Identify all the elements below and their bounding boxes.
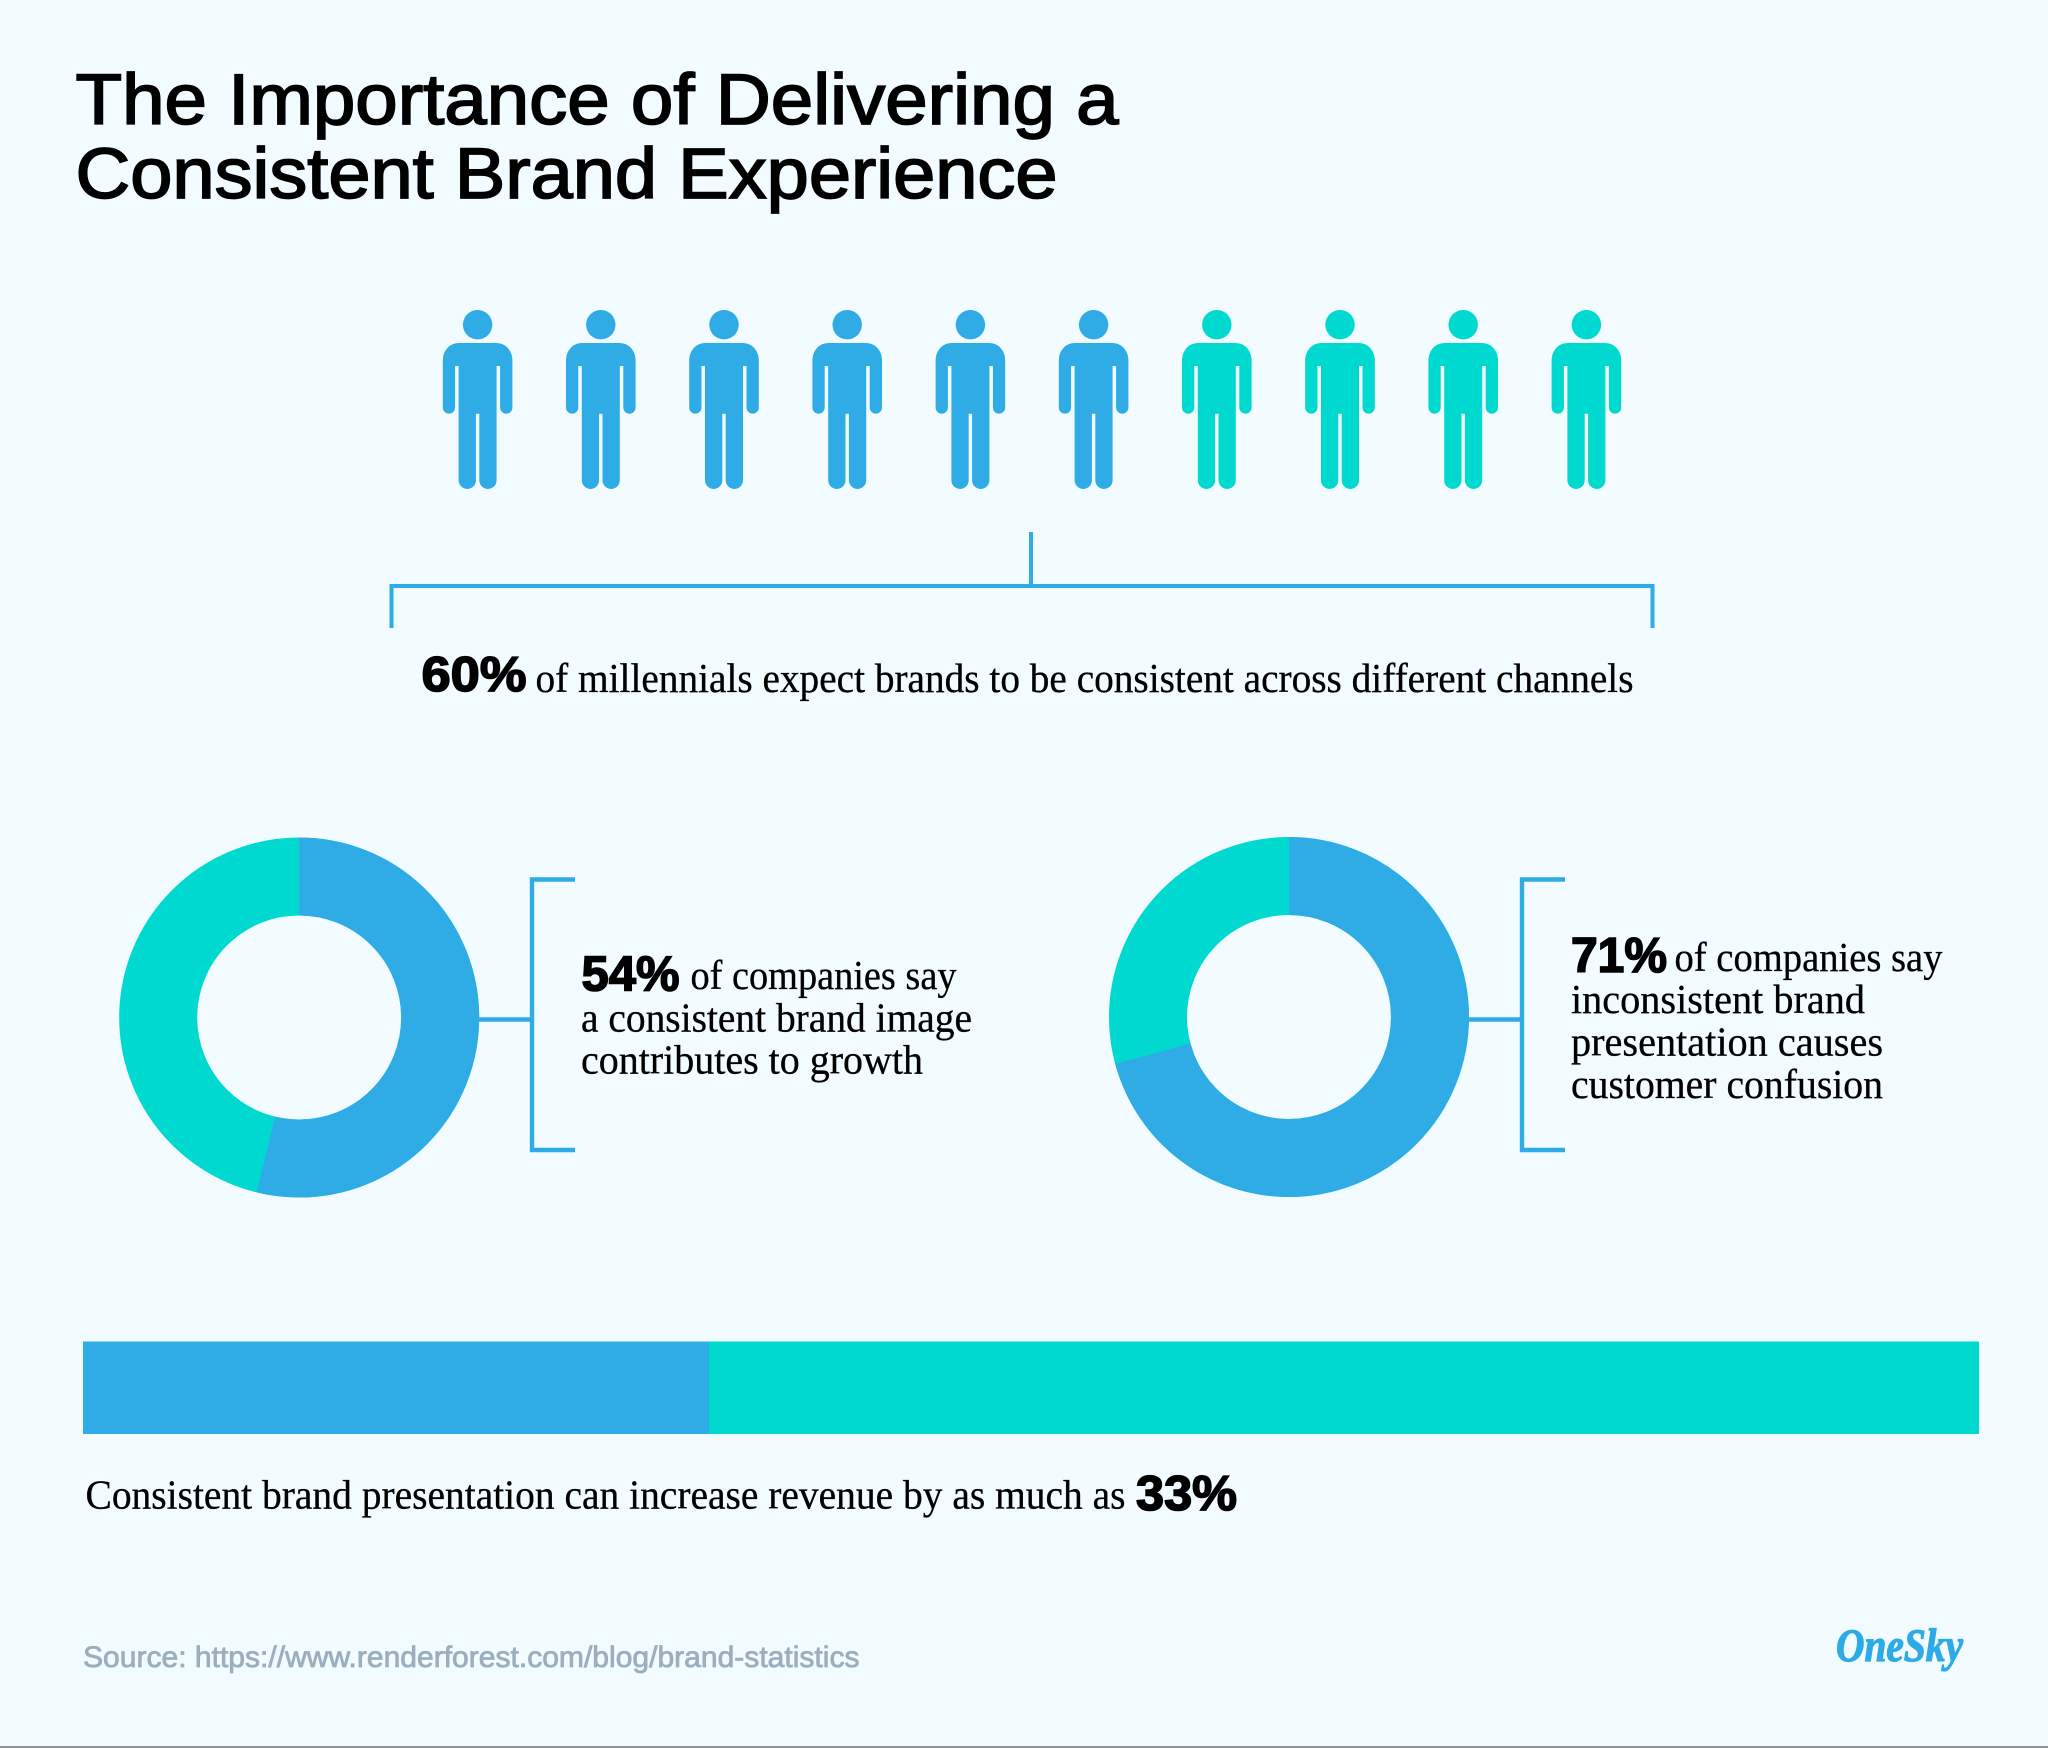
bracket under people bbox=[392, 532, 1652, 628]
statement: 54% of companies: of companies say bbox=[690, 952, 957, 998]
statement: 71% of companies: of companies say bbox=[1674, 934, 1943, 980]
statement: 60% of millennials: 60% bbox=[422, 648, 526, 702]
statement: 54% of companies: contributes to growth bbox=[581, 1036, 923, 1082]
donut chart: 54% bbox=[158, 876, 440, 1158]
statement: 71% of companies: customer confusion bbox=[1571, 1061, 1883, 1107]
statement: 54% of companies: 54% bbox=[582, 948, 680, 1002]
statement: 71% of companies: presentation causes bbox=[1571, 1018, 1883, 1064]
title: Consistent Brand Experience bbox=[76, 135, 1058, 214]
title: The Importance of Delivering a bbox=[76, 61, 1119, 140]
statement: revenue increase 33%: Consistent brand presentation can increase revenue by as much as bbox=[86, 1472, 1126, 1518]
statement: 60% of millennials: of millennials expect brands to be consistent across different channels bbox=[536, 655, 1634, 701]
bracket: 71% donut callout bbox=[1469, 880, 1565, 1150]
logo: OneSky: OneSky bbox=[1836, 1620, 1963, 1672]
title bbox=[76, 61, 1119, 214]
pictogram: ten people, six blue and four teal bbox=[443, 310, 1621, 489]
statement: 71% of companies bbox=[1571, 929, 1943, 1107]
statement: 71% of companies: 71% bbox=[1571, 929, 1667, 983]
statement: revenue increase 33%: 33% bbox=[1136, 1467, 1237, 1521]
source line: Source: https://www.renderforest.com/blog/brand-statistics bbox=[83, 1641, 860, 1674]
statement: 54% of companies bbox=[581, 948, 972, 1082]
progress bar: 33% revenue bbox=[83, 1342, 1979, 1434]
statement: 54% of companies: a consistent brand image bbox=[581, 994, 972, 1040]
bracket: 54% donut callout bbox=[479, 880, 575, 1150]
donut chart: 71% bbox=[1148, 876, 1430, 1158]
statement: 71% of companies: inconsistent brand bbox=[1571, 976, 1865, 1022]
